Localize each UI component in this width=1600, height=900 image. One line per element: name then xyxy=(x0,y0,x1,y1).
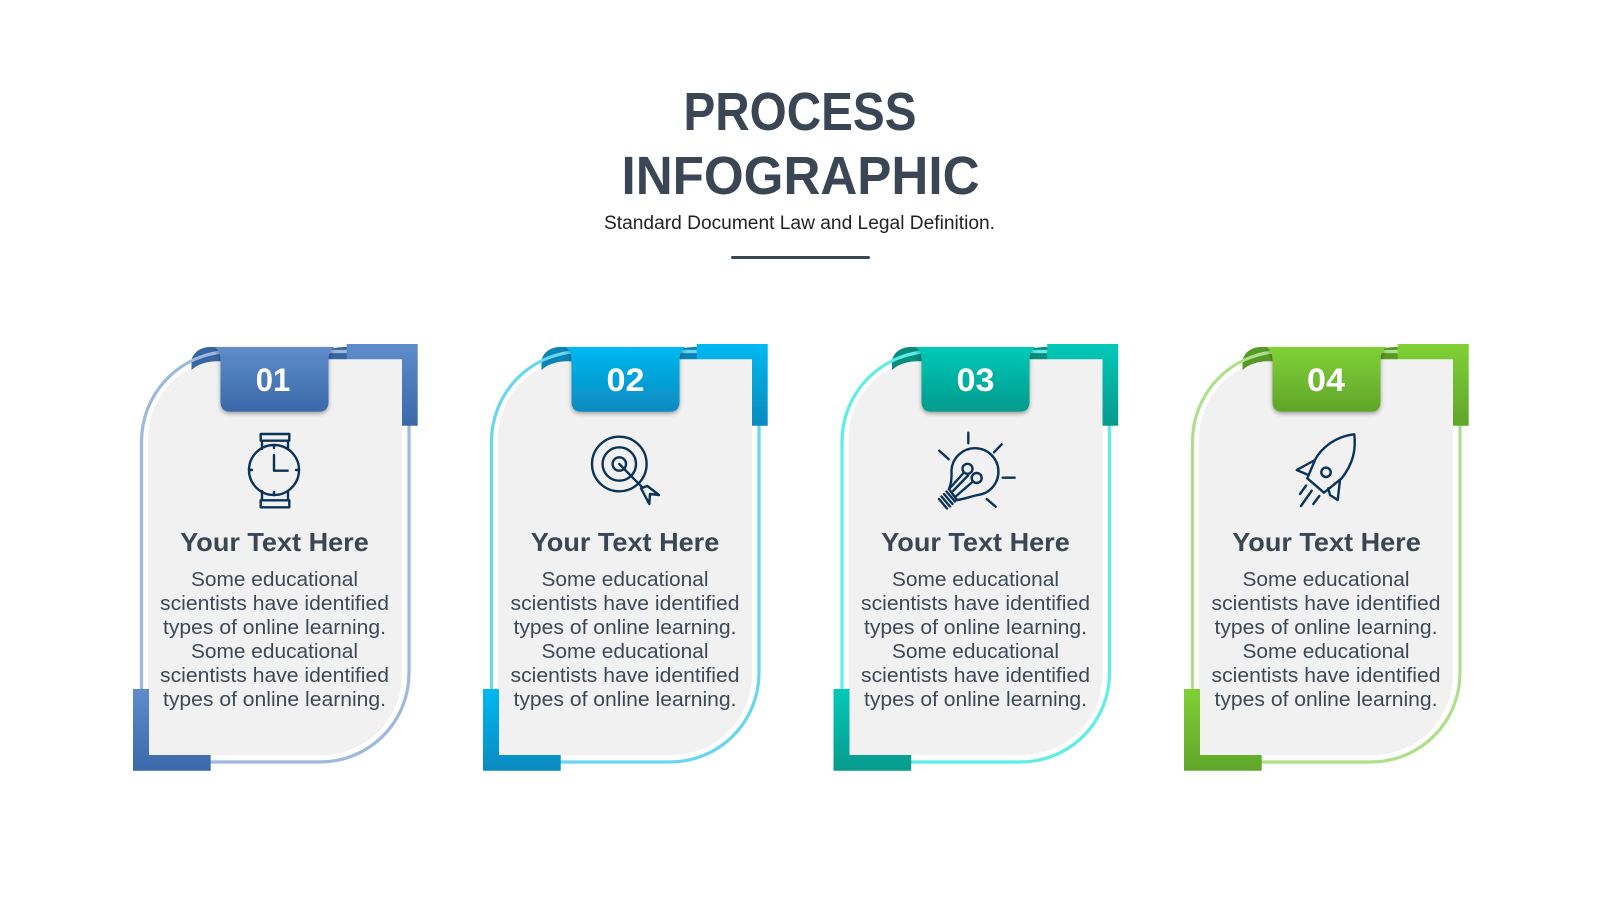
title: PROCESS xyxy=(684,82,916,142)
body text: types of online learning. xyxy=(163,688,386,711)
subtitle: Standard Document Law and Legal Definition. xyxy=(604,213,995,234)
body text: scientists have identified xyxy=(861,592,1090,615)
body text: Some educational xyxy=(1242,640,1410,663)
body text: scientists have identified xyxy=(160,664,389,687)
body text: types of online learning. xyxy=(514,616,736,639)
body text: types of online learning. xyxy=(163,616,386,639)
body text: scientists have identified xyxy=(861,664,1090,687)
number badge 02 xyxy=(566,347,686,412)
body text: Some educational xyxy=(542,640,708,663)
body text xyxy=(160,568,389,711)
body text: scientists have identified xyxy=(1212,592,1440,615)
number badge 01 xyxy=(214,347,334,412)
panel: step 02 xyxy=(483,344,768,771)
body text: types of online learning. xyxy=(864,688,1087,711)
body text: Some educational xyxy=(892,640,1059,663)
body text: types of online learning. xyxy=(1214,616,1438,639)
body text: Some educational xyxy=(191,568,358,591)
icon: watch xyxy=(249,434,299,507)
body text: Some educational xyxy=(191,640,358,663)
body text xyxy=(1212,568,1440,711)
body text: types of online learning. xyxy=(514,688,736,711)
body text: scientists have identified xyxy=(160,592,389,615)
body text: types of online learning. xyxy=(864,616,1087,639)
body text xyxy=(510,568,740,711)
body text: Some educational xyxy=(892,568,1059,591)
number badge 03: 03 xyxy=(956,362,994,398)
body text: scientists have identified xyxy=(510,592,740,615)
icon: light bulb xyxy=(939,433,1015,508)
number badge 04 xyxy=(1266,347,1386,412)
body text: scientists have identified xyxy=(1212,664,1440,687)
panel: step 03 xyxy=(834,344,1118,771)
heading: Your Text Here xyxy=(180,527,369,557)
body text xyxy=(861,568,1090,711)
title: INFOGRAPHIC xyxy=(622,146,980,206)
heading: Your Text Here xyxy=(531,527,719,557)
panel: step 04 xyxy=(1184,344,1469,771)
body text: scientists have identified xyxy=(510,664,740,687)
number badge 02: 02 xyxy=(606,362,644,398)
body text: types of online learning. xyxy=(1214,688,1438,711)
icon: target with arrow xyxy=(592,437,659,504)
number badge 03 xyxy=(916,347,1036,412)
title xyxy=(622,82,980,206)
icon: rocket xyxy=(1297,434,1355,506)
heading: Your Text Here xyxy=(1232,527,1421,557)
body text: Some educational xyxy=(1242,568,1410,591)
number badge 04: 04 xyxy=(1307,362,1345,398)
number badge 01: 01 xyxy=(256,362,290,398)
body text: Some educational xyxy=(542,568,708,591)
panel: step 01 xyxy=(133,344,418,771)
heading: Your Text Here xyxy=(881,527,1070,557)
